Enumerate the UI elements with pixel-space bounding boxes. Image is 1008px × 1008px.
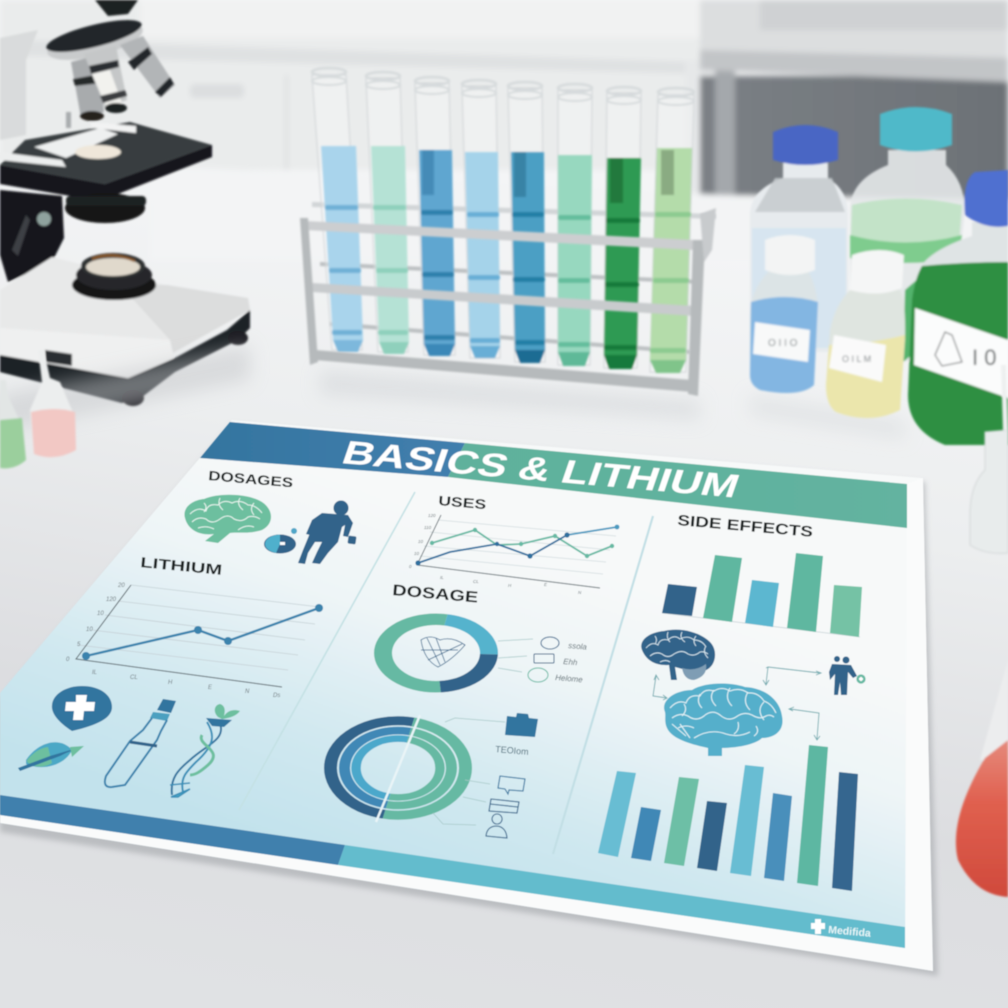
vial pink <box>30 350 76 457</box>
blurred laboratory background <box>0 0 1008 260</box>
uses line chart: 120 <box>428 513 436 518</box>
title: BASICS & LITHIUM <box>337 435 744 505</box>
lithium line chart: H <box>168 680 173 686</box>
tube 7 green <box>604 87 641 369</box>
reflections on table <box>0 345 905 440</box>
bottle: green with teal cap <box>850 107 965 362</box>
icon: dna helix <box>170 704 240 797</box>
tube 4 light blue <box>462 80 500 358</box>
icon: green brain <box>184 495 271 543</box>
tube 2 pale green <box>366 72 409 354</box>
lithium line chart: IL <box>92 670 97 676</box>
uses line chart <box>409 513 619 595</box>
icon: user <box>486 814 507 838</box>
microscope turret <box>44 0 146 67</box>
footer logo: Medifida <box>828 924 871 940</box>
arrows <box>653 667 821 740</box>
lithium line chart: 10 <box>97 611 104 617</box>
icon: dark brain <box>641 630 715 680</box>
icon: person <box>298 500 353 564</box>
tube 8 pale lime <box>650 88 694 373</box>
section: dosages <box>184 468 357 564</box>
ring chart callouts: TEOIom <box>495 744 529 757</box>
lithium line chart: CL <box>130 675 138 681</box>
microscope pillar <box>0 190 64 282</box>
uses line chart: N <box>578 590 582 595</box>
arrow: person to brain <box>763 667 821 685</box>
poster <box>0 420 933 971</box>
icon: small person <box>829 656 866 695</box>
microscope lamp <box>72 253 156 300</box>
yellow bottle label text: O I L M <box>842 354 871 364</box>
lithium line chart: Ds <box>273 693 280 699</box>
clear dropper bottle <box>970 365 1008 553</box>
tube 6 mint <box>558 84 592 366</box>
donut callouts: Helome <box>555 673 584 684</box>
lithium line chart <box>66 583 323 699</box>
microscope <box>0 0 250 406</box>
microscope condenser <box>65 193 146 223</box>
uses line chart: 10 <box>414 551 420 556</box>
uses line chart: IL <box>440 575 444 580</box>
vial green <box>0 380 26 468</box>
donut callouts: ssola <box>568 641 588 652</box>
section: lithium chart <box>66 555 323 699</box>
section: medical icons <box>18 686 240 797</box>
bottle: large green with blue cap <box>908 170 1008 445</box>
microscope objectives <box>71 36 175 121</box>
uses line chart: CL <box>473 579 479 584</box>
divider left <box>239 492 415 810</box>
icon: light blue brain <box>664 684 783 756</box>
small bottle: blue liquid <box>750 235 818 393</box>
divider right <box>553 516 653 854</box>
icon: pie <box>264 528 297 554</box>
tube 1 light blue <box>312 68 363 352</box>
section: dosage donuts <box>330 582 588 838</box>
arrow: brain to brain <box>653 675 667 700</box>
donut callouts <box>498 637 588 684</box>
heading: uses: USES <box>438 493 487 512</box>
icon: speech box <box>498 776 525 794</box>
lithium line chart: 120 <box>106 597 117 603</box>
lithium line chart: 5 <box>77 642 81 648</box>
icon: small bag <box>347 535 357 545</box>
ring chart callouts <box>433 713 538 838</box>
red flask <box>956 660 1008 897</box>
footer logo <box>811 919 871 940</box>
lithium line chart: 20 <box>117 583 125 589</box>
uses line chart: 110 <box>424 525 432 530</box>
icon: medical cross pin <box>52 686 112 731</box>
small bottle label text: O I I O <box>768 338 798 349</box>
donut chart <box>383 619 489 687</box>
icon: ampoule tube <box>105 699 176 787</box>
lithium line chart: 0 <box>66 657 70 663</box>
section: side effects <box>598 512 866 891</box>
heading: dosages: DOSAGES <box>208 468 294 490</box>
section: uses chart <box>409 493 619 595</box>
small vials left <box>0 350 76 468</box>
icon: leaf <box>18 742 84 771</box>
test tubes <box>312 68 694 373</box>
heading: dosage: DOSAGE <box>392 582 479 606</box>
poster sheet <box>0 420 933 971</box>
uses line chart: 10 <box>418 539 424 544</box>
footer band <box>0 795 905 948</box>
lower bar chart <box>598 745 858 891</box>
poster white margin right <box>905 478 933 971</box>
uses line chart: E <box>544 582 548 587</box>
uses line chart: 0 <box>409 564 412 569</box>
donut callouts: Ehh <box>563 657 578 667</box>
concentric ring chart <box>330 715 466 822</box>
heading: side effects: SIDE EFFECTS <box>677 512 814 541</box>
arrow: brain to bars <box>789 707 820 740</box>
lithium line chart: 10 <box>86 627 93 633</box>
small bottle: yellow liquid <box>826 250 905 418</box>
lithium line chart: E <box>208 685 213 691</box>
poster shadow <box>0 424 938 976</box>
bottle: clear with blue cap <box>750 125 848 352</box>
heading: lithium: LITHIUM <box>140 555 223 579</box>
icon: briefcase <box>505 713 538 737</box>
header band <box>200 422 907 528</box>
icon: window box <box>489 799 519 813</box>
microscope arm <box>0 30 38 140</box>
large bottle label text: I 0 <box>972 345 996 370</box>
tube 5 teal blue <box>508 82 545 363</box>
flask right <box>956 365 1008 897</box>
lithium line chart: N <box>245 689 250 695</box>
uses line chart: H <box>508 583 512 588</box>
microscope base <box>0 257 250 406</box>
test tube rack <box>300 208 716 396</box>
reagent bottles <box>750 107 1008 445</box>
tube 3 blue <box>415 77 455 356</box>
test tube rack back rail <box>312 202 716 354</box>
top bar chart <box>662 553 862 637</box>
microscope stage <box>0 112 212 201</box>
